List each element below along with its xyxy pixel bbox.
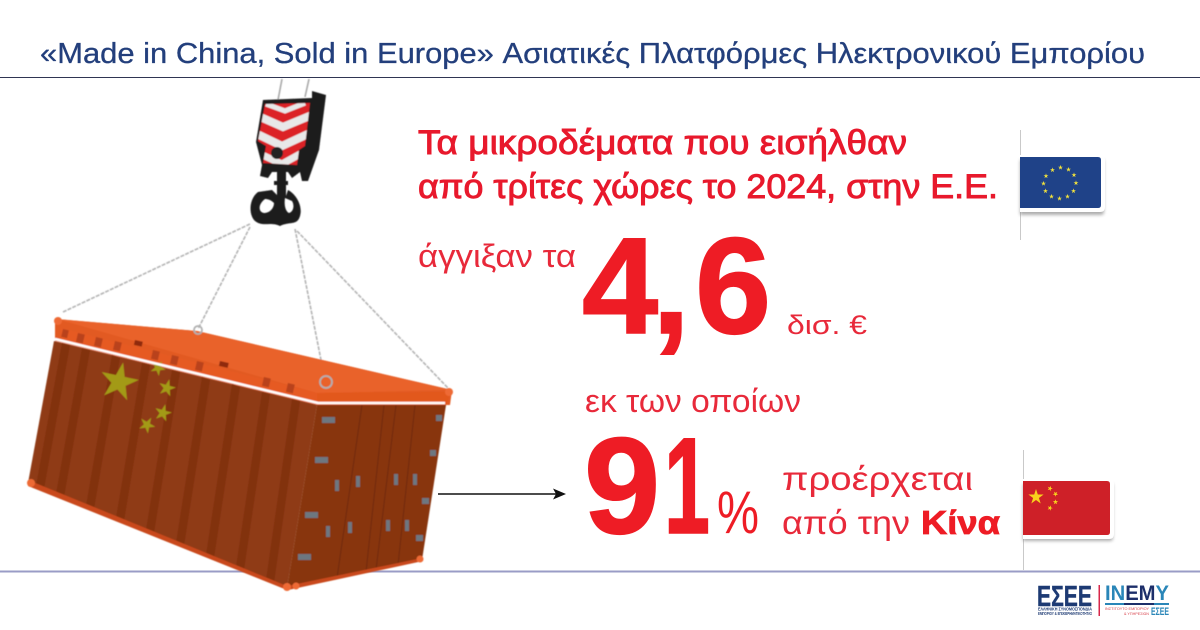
text: comes from China: Κίνα — [921, 504, 1000, 541]
container long side in flag colours — [28, 341, 317, 590]
illustration: container on crane hook — [27, 79, 453, 591]
title: «Made in China, Sold in Europe» Ασιατικές Πλατφόρμες Ηλεκτρονικού Εμπορίου — [40, 38, 1145, 70]
big figure: 4,6 billion: δισ. € — [787, 310, 867, 340]
big figure: 91 percent — [584, 410, 759, 563]
ESEE subtitle: ΕΜΠΟΡΙΟΥ & ΕΠΙΧΕΙΡΗΜΑΤΙΚΟΤΗΤΑΣ — [1038, 611, 1092, 616]
text: comes from China — [782, 460, 1000, 541]
INEMY wordmark: INEMY — [1105, 582, 1169, 605]
text: reached: άγγιξαν τα — [418, 238, 576, 274]
logo: ESEE and INEMY — [1037, 581, 1169, 618]
big figure: 91 percent: 1 — [664, 410, 710, 563]
big figure: 91 percent: 9 — [584, 410, 660, 563]
INEMY subtitle: ΙΝΣΤΙΤΟΥΤΟ ΕΜΠΟΡΙΟΥ — [1105, 607, 1149, 611]
big figure: 4,6 billion: , — [652, 210, 690, 363]
big figure: 4,6 billion: 6 — [695, 210, 771, 363]
lifting rings — [194, 326, 332, 388]
header rule — [0, 77, 1200, 78]
text: comes from China: από την — [782, 504, 910, 541]
flag stars on container — [97, 357, 178, 435]
lifting chains — [63, 224, 448, 388]
heading: parcels entering the EU: Τα μικροδέματα που εισήλθαν — [418, 124, 907, 162]
ESEE subtitle: ΕΛΛΗΝΙΚΗ ΣΥΝΟΜΟΣΠΟΝΔΙΑ — [1038, 606, 1092, 612]
footer rule — [0, 570, 1200, 572]
arrow — [438, 488, 566, 500]
INEMY subtitle: & ΥΠΗΡΕΣΙΩΝ — [1124, 612, 1149, 616]
container roof — [55, 319, 452, 405]
big figure: 91 percent: % — [717, 479, 759, 546]
ESEE wordmark: ΕΣΕΕ — [1037, 581, 1092, 613]
white edge line — [55, 339, 445, 403]
icon: EU flag tab — [1020, 130, 1105, 240]
INEMY subtitle — [1105, 607, 1149, 616]
heading: parcels entering the EU — [418, 124, 998, 206]
logo: ESEE and INEMY: ΕΣΕΕ — [1151, 606, 1169, 618]
icon: China flag tab — [1023, 450, 1114, 570]
big figure: 4,6 billion — [582, 210, 867, 363]
text: comes from China: προέρχεται — [782, 460, 973, 497]
corner castings — [27, 317, 453, 591]
ESEE subtitle — [1038, 606, 1092, 616]
crane hook block — [251, 91, 326, 226]
container doors — [287, 405, 446, 590]
crane ropes — [278, 79, 309, 100]
big figure: 4,6 billion: 4 — [582, 210, 658, 363]
text: of which: εκ των οποίων — [585, 383, 801, 419]
heading: parcels entering the EU: από τρίτες χώρες το 2024, στην Ε.Ε. — [418, 168, 998, 206]
